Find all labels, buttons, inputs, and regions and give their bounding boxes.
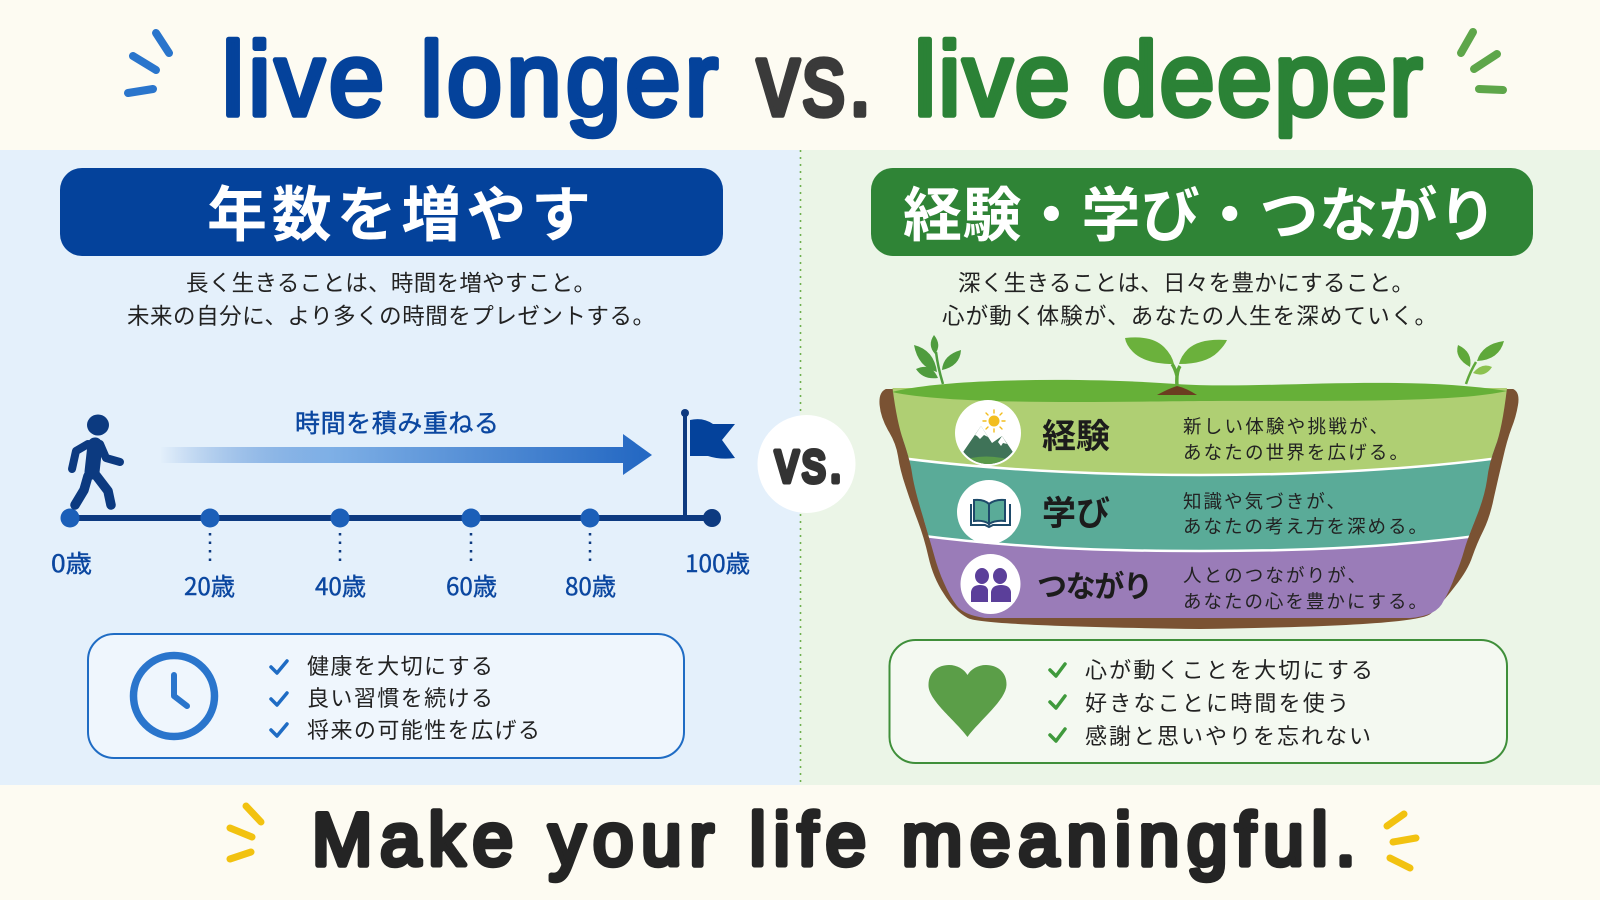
badge: vs circle: vs. (775, 431, 842, 495)
icon: blue sparks (128, 33, 169, 93)
title (222, 22, 1422, 138)
icon: check marks (1050, 664, 1065, 741)
icon: yellow sparks left (230, 806, 261, 859)
text: left description (127, 266, 655, 331)
text: layer experience: 新しい体験や挑戦が、 (1183, 413, 1388, 439)
soil outline (880, 390, 1518, 628)
text: layer connection (1037, 562, 1427, 614)
text: checklist: 将来の可能性を広げる (307, 713, 540, 745)
title: live longer: live longer (222, 22, 718, 138)
text: layer connection: あなたの心を豊かにする。 (1183, 588, 1427, 614)
text: checklist (307, 649, 540, 745)
text: left description: 長く生きることは、時間を増やすこと。 (186, 266, 596, 298)
icon: clock (134, 656, 214, 736)
text: layer learning: 知識や気づきが、 (1183, 488, 1345, 514)
panel: left checklist (88, 634, 684, 758)
text: checklist: 感謝と思いやりを忘れない (1085, 719, 1371, 751)
icon: check marks (271, 661, 287, 736)
arrow: time gradient (160, 434, 652, 475)
icon: people (960, 554, 1020, 614)
icon: flag (681, 409, 735, 518)
text: layer learning (1042, 486, 1427, 539)
text: layer learning: あなたの考え方を深める。 (1183, 513, 1427, 539)
plant: center sprout (1125, 337, 1227, 386)
text: checklist (1085, 653, 1373, 751)
panel: right checklist (890, 640, 1507, 763)
text: layer connection: つながり (1037, 562, 1153, 606)
badge: vs circle (758, 415, 856, 513)
text: layer learning: 学び (1042, 486, 1110, 535)
text: checklist: 健康を大切にする (307, 649, 493, 681)
text: layer connection: 人とのつながりが、 (1183, 562, 1366, 588)
layer: teal (880, 440, 1520, 551)
layer: green (892, 388, 1507, 474)
text: layer experience: 経験 (1042, 409, 1110, 458)
layer: purple (924, 520, 1476, 618)
chart: timeline: 20歳 (184, 567, 235, 602)
text: checklist: 好きなことに時間を使う (1085, 686, 1349, 718)
footer slogan: Make your life meaningful. (312, 798, 1356, 881)
text: layer experience (1042, 409, 1408, 465)
text: layer experience: あなたの世界を広げる。 (1183, 439, 1408, 465)
plant: right sprout (1457, 341, 1504, 384)
icon: green sparks (1461, 32, 1503, 90)
plant: left sprout (914, 335, 961, 384)
text: checklist: 心が動くことを大切にする (1085, 653, 1373, 685)
text: left description: 未来の自分に、より多くの時間をプレゼントする。 (127, 299, 655, 331)
text: arrow label: 時間を積み重ねる (295, 404, 499, 440)
heading: right banner: 経験・学び・つながり (903, 168, 1497, 253)
panel: live longer background (0, 150, 800, 785)
chart: soil layers (880, 335, 1520, 630)
icon: heart (928, 665, 1007, 737)
soil layer fills (892, 388, 1507, 618)
icon: mountains and sun (955, 400, 1021, 470)
chart: timeline: 60歳 (446, 567, 497, 602)
background: bottom band (0, 785, 1600, 900)
icon: walking person (72, 414, 120, 505)
heading: left banner: 年数を増やす (207, 167, 591, 254)
chart: timeline: 80歳 (565, 567, 616, 602)
background: top band (0, 0, 1600, 150)
text: checklist: 良い習慣を続ける (307, 681, 493, 713)
text: right description (942, 266, 1437, 331)
soil mound (1157, 386, 1197, 395)
panel: live deeper background (800, 150, 1600, 785)
title: vs.: vs. (757, 22, 872, 138)
text: right description: 深く生きることは、日々を豊かにすること。 (958, 266, 1414, 298)
grass top (892, 380, 1507, 402)
chart: timeline: 40歳 (315, 567, 366, 602)
heading: left banner (60, 167, 723, 256)
title: live deeper: live deeper (914, 22, 1422, 138)
chart: timeline (51, 409, 750, 602)
chart: timeline: 100歳 (685, 544, 750, 579)
icon: yellow sparks right (1387, 814, 1416, 868)
icon: book (957, 480, 1021, 544)
chart: timeline: 0歳 (51, 544, 92, 579)
text: right description: 心が動く体験が、あなたの人生を深めていく。 (942, 299, 1437, 331)
